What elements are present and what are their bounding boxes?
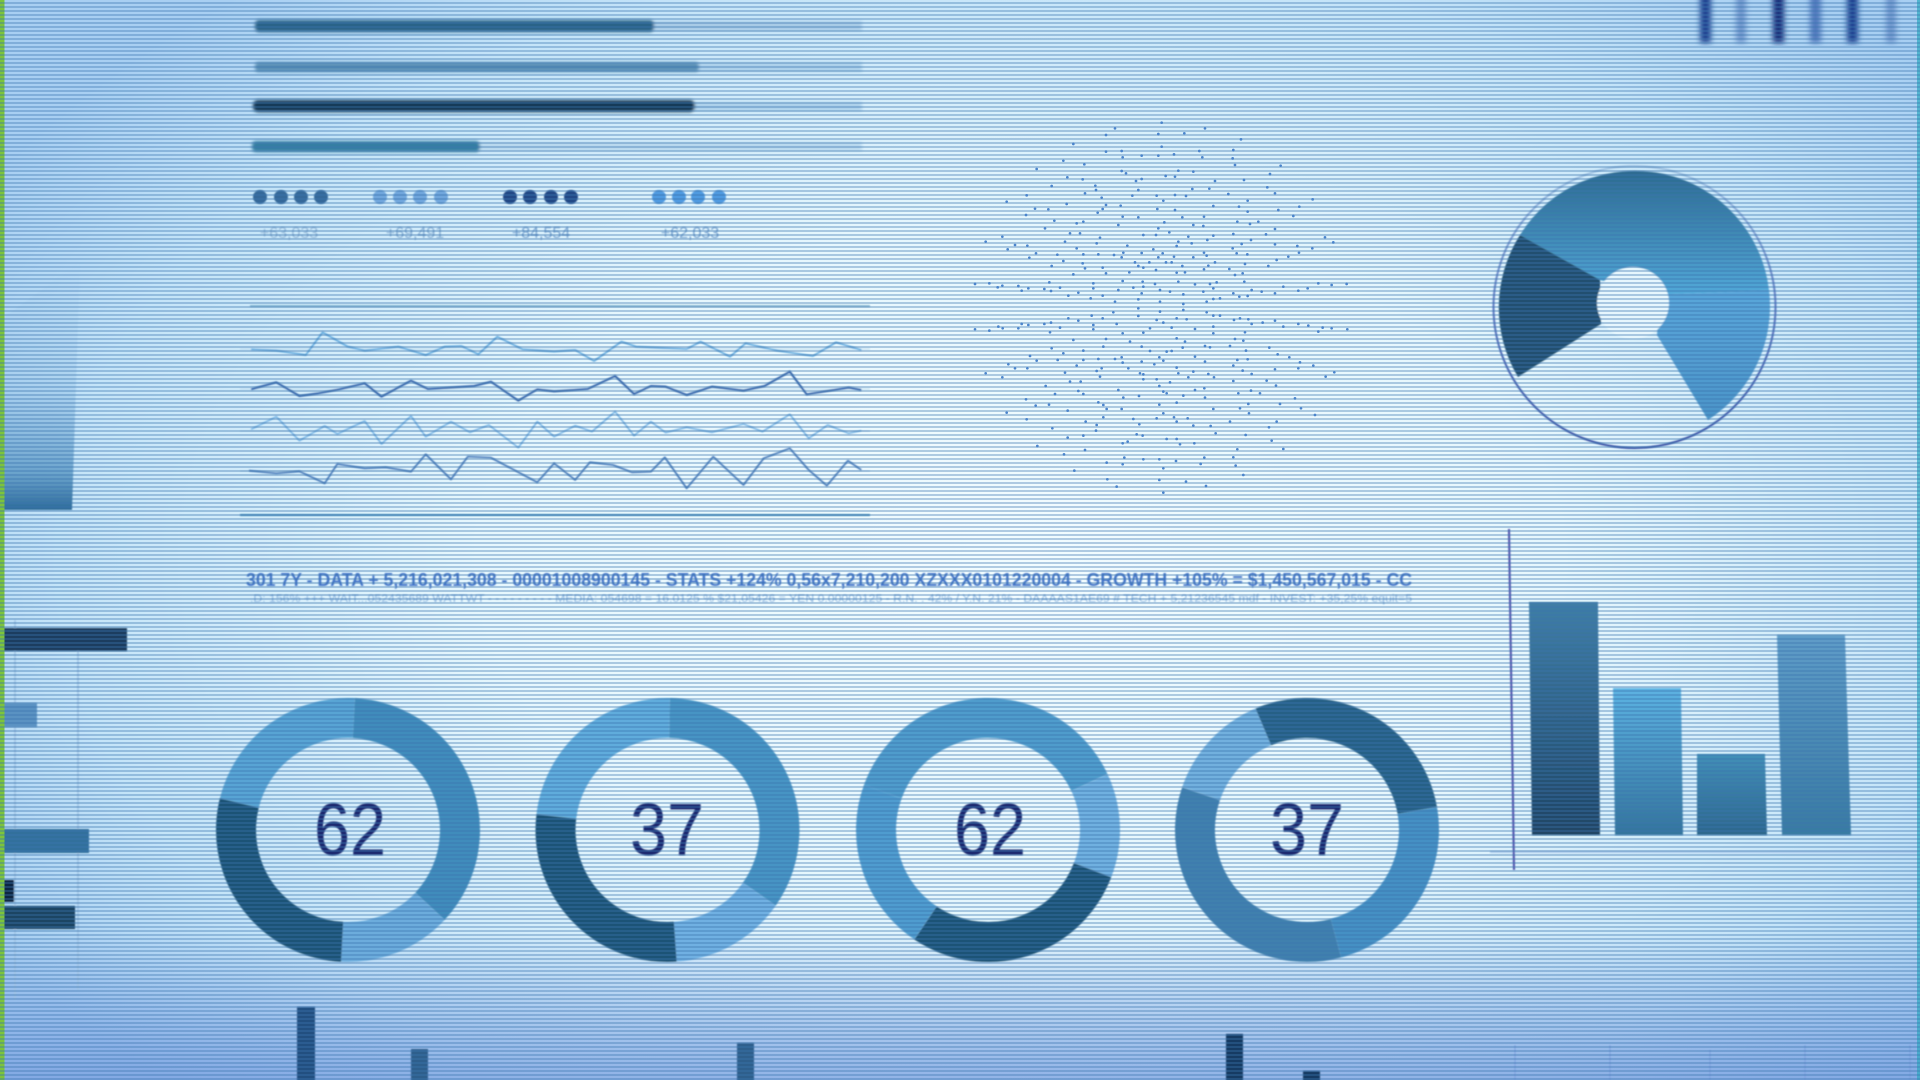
line series 4 <box>249 448 861 488</box>
bar chart axis <box>1509 529 1514 870</box>
top progress bars <box>252 20 862 152</box>
line series 1 <box>251 332 861 361</box>
top right tick bars <box>1700 0 1896 43</box>
bar chart baseline <box>1490 851 1920 853</box>
donut 4 <box>1160 683 1454 977</box>
teal right edge strip <box>1917 0 1920 1080</box>
pie dark segment <box>1499 235 1601 377</box>
left bar 4 <box>0 880 14 902</box>
dot group 1 <box>253 190 328 204</box>
dot values: +62,033 <box>661 225 719 242</box>
line charts <box>240 306 870 515</box>
left gradient bar <box>0 262 80 510</box>
dot values: +84,554 <box>512 225 570 242</box>
donut 3 value: 62 <box>954 788 1026 871</box>
line series 2 <box>251 372 861 401</box>
dot values: +69,491 <box>386 225 444 242</box>
bar chart <box>1490 529 1920 870</box>
dot values <box>260 225 719 242</box>
bar 3 <box>1697 754 1767 835</box>
pie outline ring <box>1494 166 1776 448</box>
donut 4 value: 37 <box>1270 788 1344 871</box>
bottom faint ticks <box>1515 1045 1910 1080</box>
donut 2 value: 37 <box>630 788 704 871</box>
pie large segment <box>1520 171 1769 295</box>
left bar 1 <box>0 628 127 651</box>
dot values: +63,033 <box>260 225 318 242</box>
ticker secondary line: .D: 156% +++ WAIT...052435689 WATTWT - - - - - - - - - MEDIA: 054698 = 16.0125 % $21,05426 = YEN 0.00000125 - R.N. . 42% / Y.N. 21% - DAAAAS1AE69 # TECH + 5,21236545 mdf - INVEST: +35,25% equit=5 <box>250 593 1412 605</box>
ticker text <box>246 570 1412 605</box>
donut 3 <box>833 675 1143 985</box>
dot group 4 <box>652 190 726 204</box>
left bar 2 <box>0 703 37 727</box>
left faint grid lines <box>15 620 78 1000</box>
donut 2 <box>512 674 823 986</box>
dot group 2 <box>373 190 448 204</box>
left bar 5 <box>0 906 75 929</box>
bar 4 <box>1777 635 1851 835</box>
radial dot scatter <box>975 123 1347 493</box>
bar 2 <box>1613 688 1683 835</box>
bottom cropped bars <box>297 1007 1910 1080</box>
left bar 3 <box>0 829 89 853</box>
green left edge strip <box>0 0 4 1080</box>
dot group 3 <box>503 190 578 204</box>
dot groups with values <box>253 190 726 242</box>
pie hole <box>1597 267 1669 339</box>
donut 1 value: 62 <box>314 788 386 871</box>
line series 3 <box>251 412 861 448</box>
bar 1 <box>1529 602 1600 835</box>
donut 1 <box>190 672 506 988</box>
ticker main line: 301 7Y - DATA + 5,216,021,308 - 00001008900145 - STATS +124% 0,56x7,210,200 XZXXX0101220004 - GROWTH +105% = $1,450,567,015 - CC <box>246 570 1412 590</box>
pie chart <box>1494 166 1776 448</box>
left edge cropped panel <box>0 262 127 1000</box>
pie lower segment <box>1657 290 1770 420</box>
